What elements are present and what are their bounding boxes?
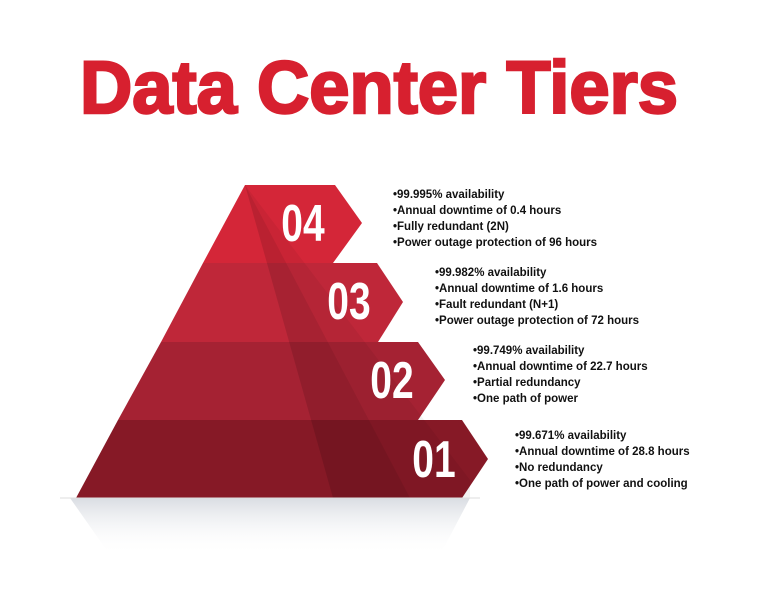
text: tier 2: •Partial redundancy [473,377,581,389]
text: tier 2: •99.749% availability [473,345,585,357]
text: tier 3 [435,267,639,327]
text: tier 1: •No redundancy [515,462,603,474]
reflection [70,498,470,555]
text: tier 1: •99.671% availability [515,430,627,442]
shaded face [245,185,410,498]
text: tier 3: •Fault redundant (N+1) [435,299,558,311]
text: tier 4: •Power outage protection of 96 hours [393,237,597,249]
text: tier 2 [473,345,648,405]
text: tier 2: •Annual downtime of 22.7 hours [473,361,648,373]
text: tier 1: •Annual downtime of 28.8 hours [515,446,690,458]
text: tier 4: •99.995% availability [393,189,505,201]
tier 1 band [76,420,488,498]
text: tier 3: •Power outage protection of 72 hours [435,315,639,327]
tier 2 band [118,342,445,420]
text: tier 2: •One path of power [473,393,578,405]
text: tier 3: •Annual downtime of 1.6 hours [435,283,603,295]
tier 3 band [161,263,403,342]
number 04: 04 [281,193,325,252]
text: tier 1 [515,430,690,490]
text: tier 1: •One path of power and cooling [515,478,688,490]
title: Data Center Tiers [80,46,678,129]
text: tier 4: •Fully redundant (2N) [393,221,509,233]
text: tier 4 [393,189,597,249]
text: tier 4: •Annual downtime of 0.4 hours [393,205,561,217]
tier 4 band [203,185,362,263]
text: tier 3: •99.982% availability [435,267,547,279]
number 01: 01 [412,429,456,488]
number 03: 03 [327,271,371,330]
pyramid [60,185,488,498]
number 02: 02 [370,350,414,409]
